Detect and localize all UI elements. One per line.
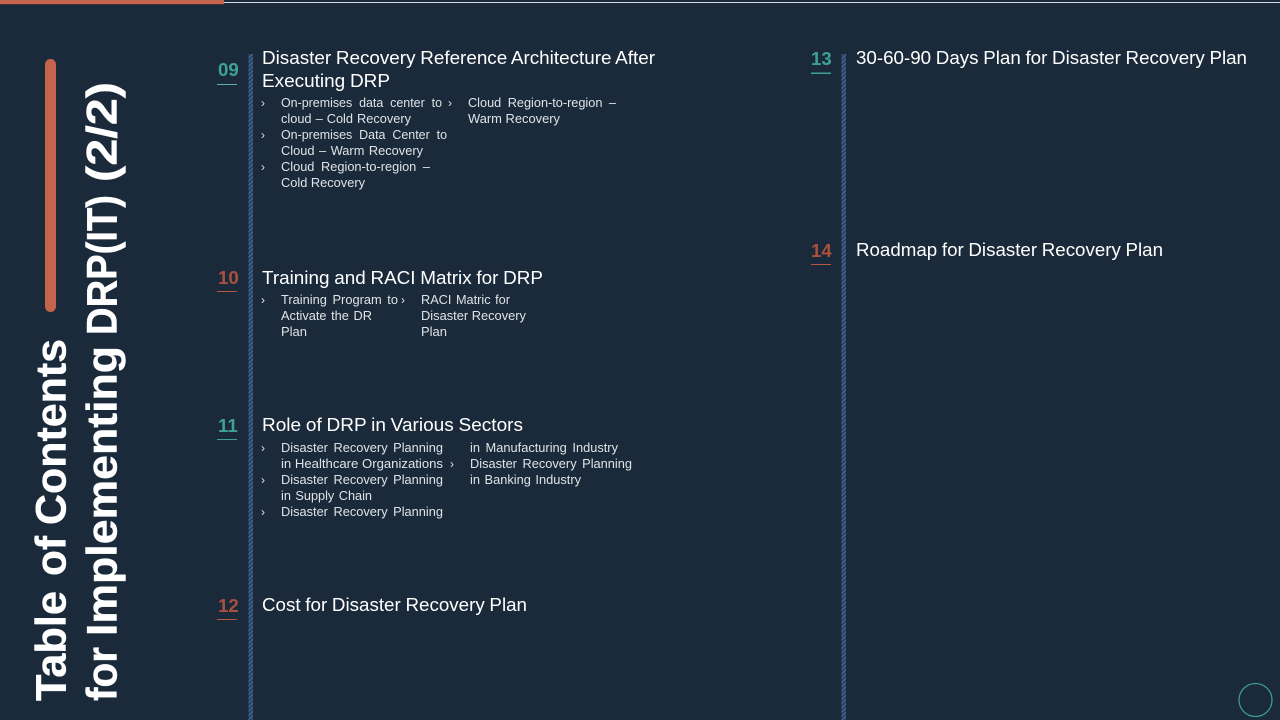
bullet list 09: cloud – Cold Recovery (281, 112, 412, 126)
bullet list 10: Training Program to (281, 293, 398, 307)
bullet list 11: › (261, 473, 265, 487)
bullet list 10: Plan (421, 325, 447, 339)
bullet list 11 (261, 441, 632, 519)
bullet list 09: › (261, 96, 265, 110)
bullet list 11: in Supply Chain (281, 489, 372, 503)
number 11: 11 (218, 415, 238, 436)
number 13: 13 (811, 48, 832, 69)
bullet list 10 (261, 293, 527, 339)
title: Contents (28, 339, 76, 525)
bullet list 11: Disaster Recovery Planning (281, 505, 443, 519)
bullet list 10: Activate the DR (281, 309, 372, 323)
bullet list 11: › (261, 441, 265, 455)
section 11 (217, 414, 632, 519)
section 09 (217, 47, 655, 190)
heading 09 (262, 47, 655, 91)
top accent bar (0, 0, 1280, 5)
divider: right column (842, 54, 846, 720)
number 14: 14 (811, 240, 832, 261)
bullet list 09: Warm Recovery (468, 112, 561, 126)
title: Implementing (80, 346, 126, 636)
title: (2/2) (80, 82, 126, 182)
title accent bar (45, 59, 56, 312)
bullet list 11: Disaster Recovery Planning (281, 473, 443, 487)
heading 10: Training and RACI Matrix for DRP (262, 267, 543, 288)
bullet list 10: RACI Matric for (421, 293, 511, 307)
bullet list 11: in Manufacturing Industry (470, 441, 619, 455)
heading 12: Cost for Disaster Recovery Plan (262, 594, 527, 615)
title: of (28, 535, 76, 576)
bullet list 09: On-premises data center to (281, 96, 442, 110)
bullet list 11: Disaster Recovery Planning (281, 441, 443, 455)
heading 09: Disaster Recovery Reference Architecture After (262, 47, 655, 68)
bullet list 11: in Healthcare Organizations (281, 457, 443, 471)
bullet list 11: › (261, 505, 265, 519)
bullet list 11: Disaster Recovery Planning (470, 457, 632, 471)
bullet list 09: Cloud Region-to-region – (468, 96, 617, 110)
corner circle (1239, 684, 1272, 716)
bullet list 10: Plan (281, 325, 307, 339)
bullet list 09: › (261, 128, 265, 142)
section 14 (811, 239, 1163, 265)
bullet list 09: Cold Recovery (281, 176, 366, 190)
bullet list 09: On-premises Data Center to (281, 128, 447, 142)
bullet list 10: › (401, 293, 405, 307)
bullet list 09: Cloud – Warm Recovery (281, 144, 424, 158)
title: Table (28, 591, 76, 701)
heading 13: 30-60-90 Days Plan for Disaster Recovery Plan (856, 47, 1247, 68)
bullet list 09: › (261, 160, 265, 174)
title: DRP(IT) (80, 195, 126, 335)
divider: left column (248, 54, 253, 720)
bullet list 11: in Banking Industry (470, 473, 582, 487)
number 10: 10 (218, 267, 239, 288)
bullet list 09 (261, 96, 617, 190)
bullet list 11: › (450, 457, 454, 471)
number 09: 09 (218, 59, 239, 80)
section 12 (217, 594, 527, 620)
heading 09: Executing DRP (262, 70, 390, 91)
section 13 (811, 47, 1247, 74)
number 12: 12 (218, 595, 239, 616)
title (28, 82, 126, 701)
section 10 (217, 267, 543, 339)
heading 14: Roadmap for Disaster Recovery Plan (856, 239, 1163, 260)
heading 11: Role of DRP in Various Sectors (262, 414, 523, 435)
bullet list 10: › (261, 293, 265, 307)
bullet list 10: Disaster Recovery (421, 309, 527, 323)
bullet list 09: Cloud Region-to-region – (281, 160, 431, 174)
title: for (80, 647, 126, 701)
bullet list 09: › (448, 96, 452, 110)
